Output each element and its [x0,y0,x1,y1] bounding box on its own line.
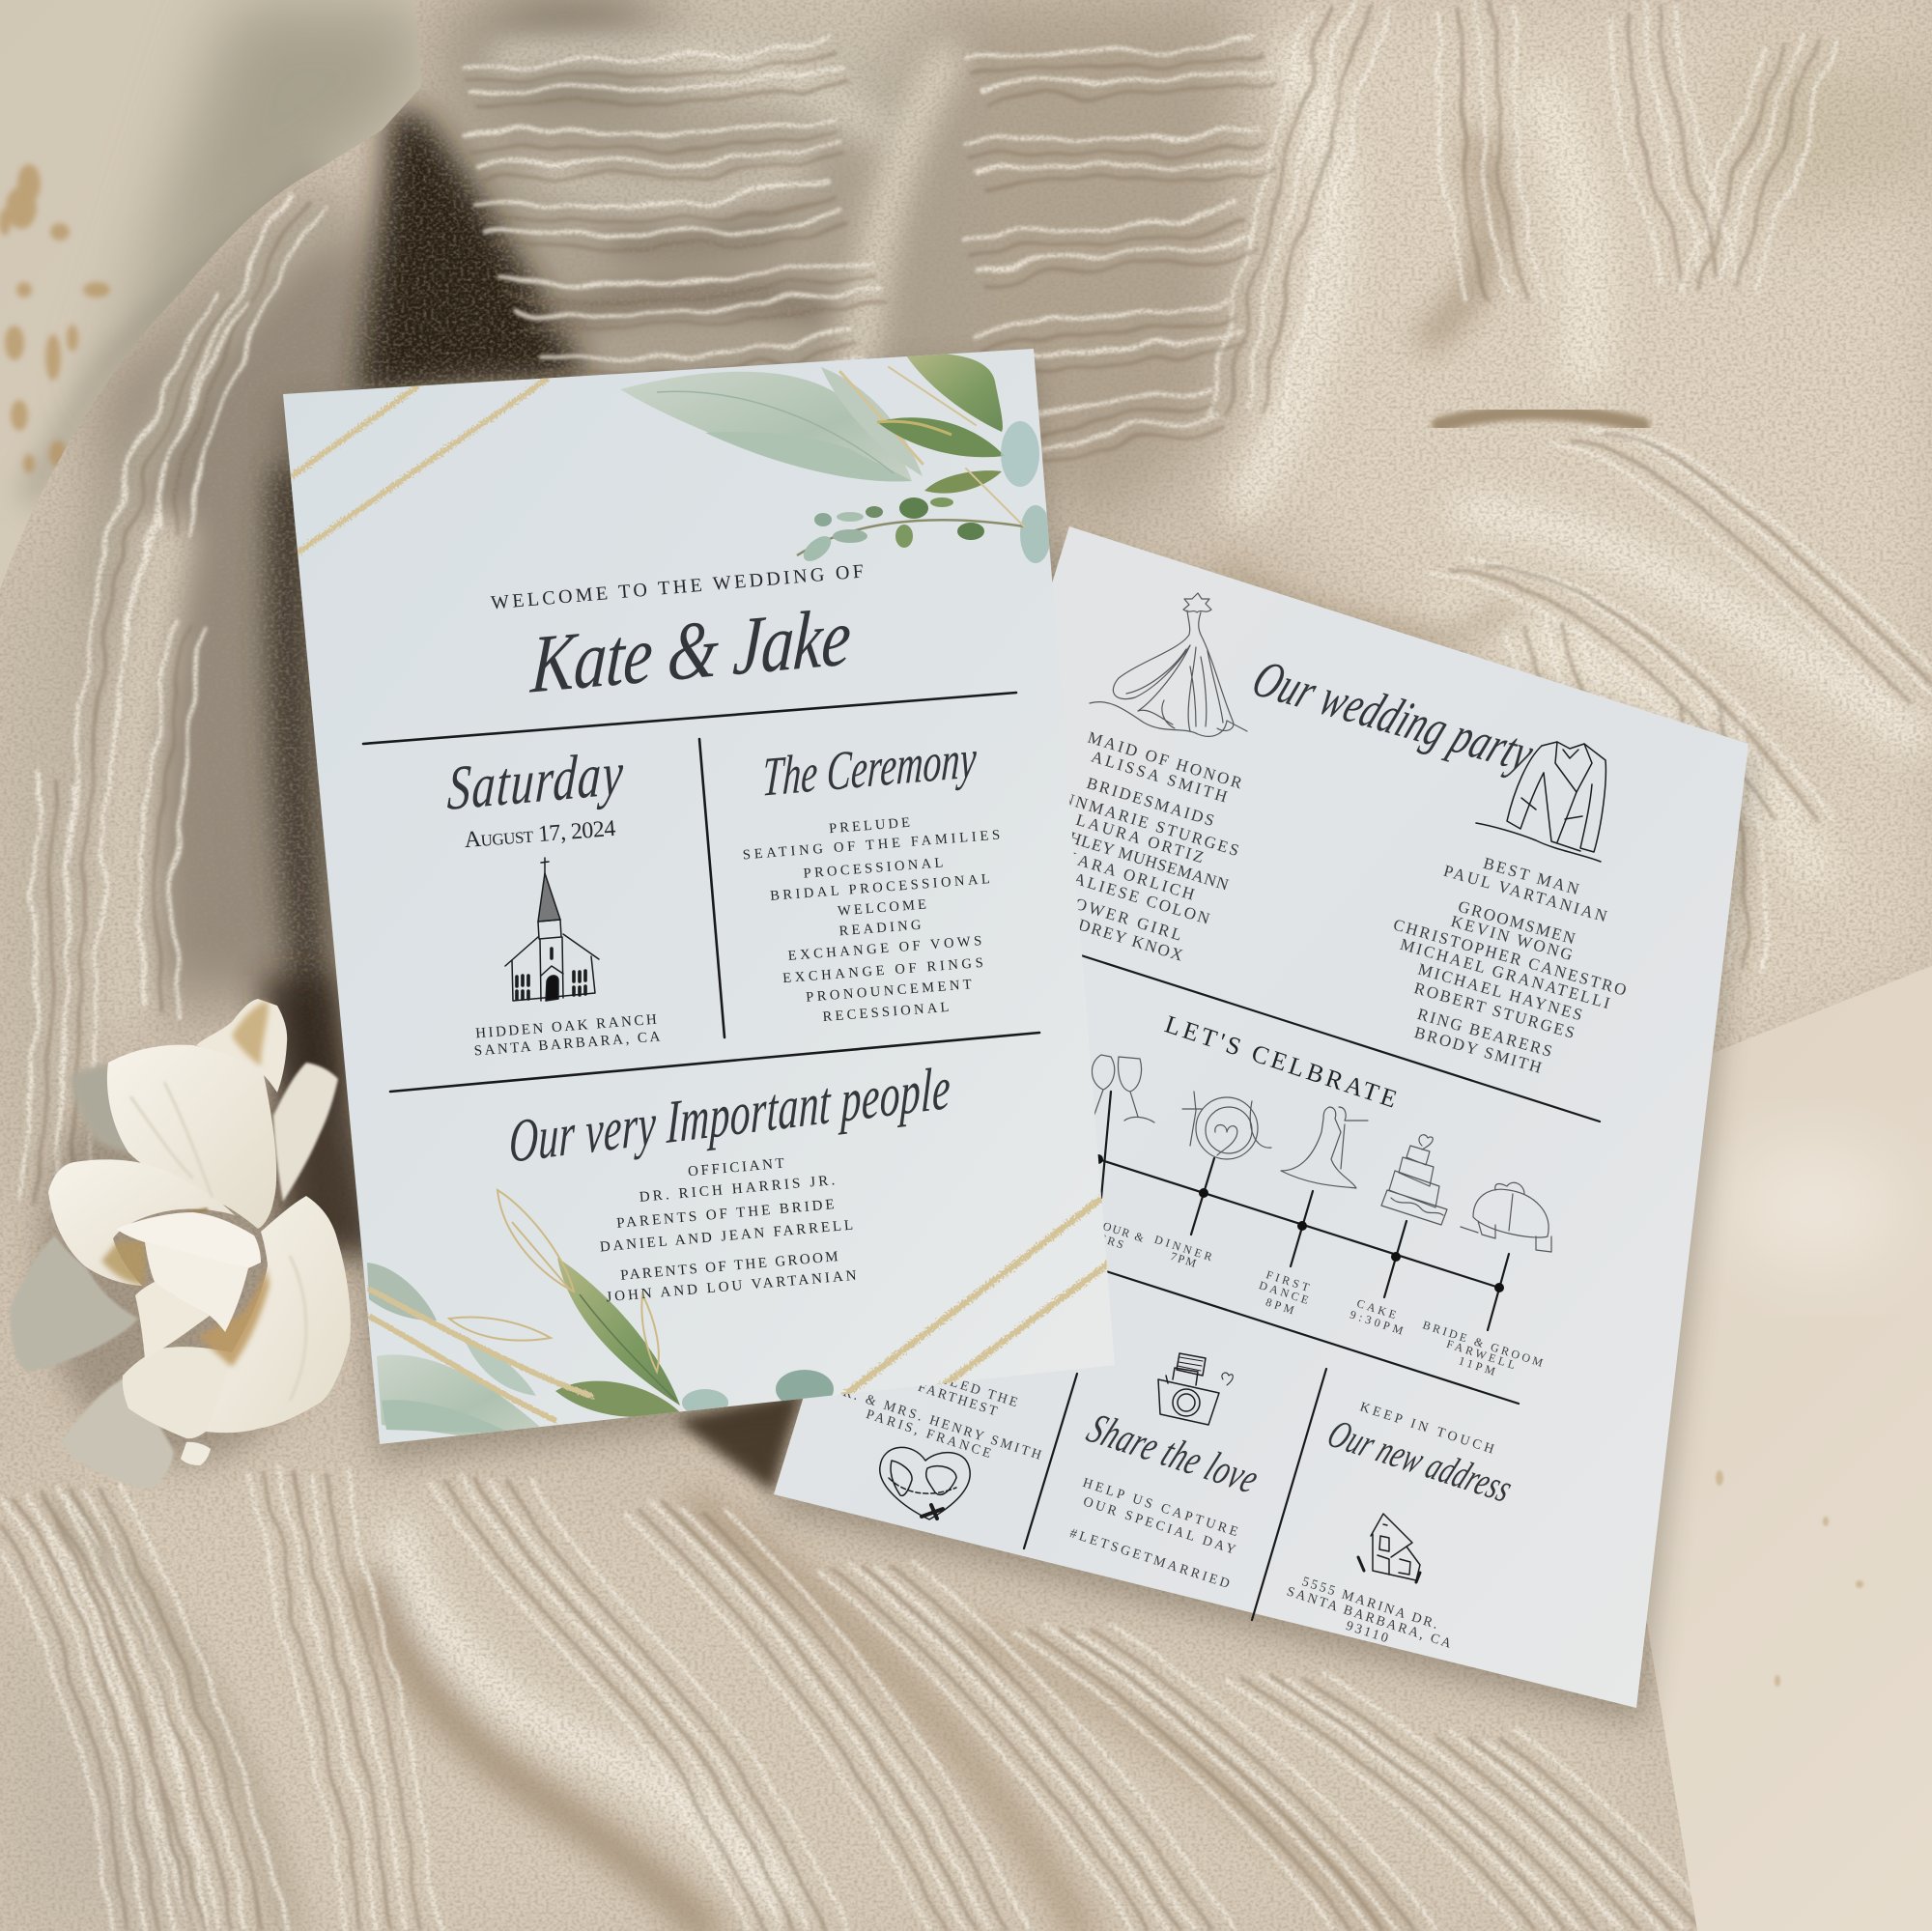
panel: date and venue: HIDDEN OAK RANCH [475,1012,657,1041]
decoration: gold diagonal lines top left [292,380,546,554]
timeline labels: 11PM [1457,1353,1497,1378]
panel: ceremony order: READING [838,918,923,939]
left column: bride party names [1045,728,1245,965]
panel: important people: DANIEL AND JEAN FARRELL [599,1218,854,1255]
panel: important people: PARENTS OF THE GROOM [620,1249,838,1284]
panel: share the love: Share the love [1080,1406,1266,1502]
right column: groom party names: MICHAEL HAYNES [1416,960,1584,1024]
panel: our new address: 93110 [1344,1619,1390,1646]
panel: share the love: OUR SPECIAL DAY [1081,1494,1237,1558]
panel: ceremony order: BRIDAL PROCESSIONAL [770,871,990,904]
timeline labels [1022,1193,1545,1378]
icon: wedding dress [1090,593,1247,736]
shadow: dark gap beside flower [261,976,382,1256]
panel: ceremony order [742,728,1001,1025]
panel: important people: OFFICIANT [687,1156,785,1179]
panel: our new address: KEEP IN TOUCH [1358,1400,1495,1458]
heading: welcome: WELCOME TO THE WEDDING OF [490,561,865,613]
right column: groom party names: GROOMSMEN [1456,897,1577,948]
timeline labels: 8PM [1264,1295,1296,1317]
foliage: bottom left watercolor leaves [367,1190,834,1439]
panel: ceremony order: PRONOUNCEMENT [806,977,973,1006]
heading: let's celebrate: LET'S CELBRATE [1161,1009,1401,1114]
left column: bride party names: ANNMARIE STURGES [1046,784,1241,860]
shadows beneath cards [275,362,1753,1724]
panel: our new address [1285,1400,1520,1652]
panel: ceremony order: PROCESSIONAL [803,855,944,882]
timeline labels: DINNER [1152,1233,1214,1264]
panel: ceremony order: EXCHANGE OF VOWS [787,933,982,964]
panel: traveled the farthest: TRAVELED THE [895,1358,1019,1410]
heading: couple names: Kate & Jake [528,590,853,710]
panel: share the love [1067,1353,1266,1592]
panel: date and venue: Saturday [446,739,625,824]
heading: our wedding party: Our wedding party [1244,650,1543,783]
left column: bride party names: KARA ORLICH [1062,846,1197,904]
panel: important people: DR. RICH HARRIS JR. [639,1173,836,1206]
right column: groom party names: ROBERT STURGES [1412,979,1577,1042]
panel: traveled the farthest: PARIS, FRANCE [864,1407,993,1462]
panel: ceremony order: PRELUDE [829,815,911,837]
timeline labels: FIRST [1264,1267,1312,1294]
icon: getaway car [1461,1182,1551,1252]
foliage: top right watercolor leaves [620,354,1051,566]
right column: groom party names: RING BEARERS [1415,1005,1554,1061]
panel: our new address: Our new address [1321,1411,1520,1511]
left column: bride party names: ANALIESE COLON [1045,861,1211,928]
panel: ceremony order: The Ceremony [761,728,979,809]
icon: church [505,858,599,1001]
right column: groom party names: KEVIN WONG [1449,912,1575,964]
timeline chart [1094,1092,1509,1330]
icon: groom jacket [1476,742,1605,862]
icon: wine glasses [1092,1055,1154,1122]
card: front, wedding programme [283,349,1115,1444]
panel: date and venue: SANTA BARBARA, CA [473,1029,661,1060]
icon: first dance couple [1281,1107,1368,1188]
left column: bride party names: ASHLEY MUHSEMANN [1045,821,1231,895]
icon: house [1358,1514,1420,1582]
timeline labels: FARWELL [1445,1337,1517,1372]
panel: important people [508,1053,951,1305]
panel: important people: Our very Important people [508,1053,951,1176]
panel: share the love: #LETSGETMARRIED [1067,1526,1232,1592]
right column: groom party names: CHRISTOPHER CANESTRO [1391,915,1629,1000]
panel: traveled the farthest: FARTHEST [916,1380,999,1419]
panel: ceremony order: WELCOME [838,896,927,920]
timeline labels: COCKTAIL HOUR & [1022,1193,1147,1245]
icon: heart globe [880,1447,970,1519]
timeline labels: DANCE [1258,1278,1310,1307]
panel: our new address: SANTA BARBARA, CA [1285,1584,1454,1652]
timeline labels: 7PM [1169,1249,1198,1270]
timeline labels: BRIDE & GROOM [1421,1318,1545,1370]
icon: camera [1158,1353,1233,1425]
panel: date and venue [446,739,661,1060]
icon: dinner plate [1182,1092,1271,1159]
panel: our new address: 5555 MARINA DR. [1300,1575,1439,1633]
card: back side, wedding party and timeline [774,526,1748,1708]
right column: groom party names [1391,854,1629,1077]
panel: ceremony order: RECESSIONAL [822,1000,950,1025]
timeline labels: CAKE [1355,1296,1398,1321]
left column: bride party names: LAURA ORTIZ [1074,810,1206,866]
timeline labels: APPETIZERS [1038,1211,1125,1252]
right column: groom party names: PAUL VARTANIAN [1441,862,1609,925]
panel: date and venue: August 17, 2024 [464,816,616,853]
icon: wedding cake [1381,1135,1447,1225]
right column: groom party names: BRODY SMITH [1412,1023,1544,1077]
timeline labels: 9:30PM [1349,1308,1406,1338]
panel: share the love: HELP US CAPTURE [1081,1476,1239,1540]
flower: white gardenia [10,999,351,1489]
left column: bride party names: FLOWER GIRL [1049,887,1184,945]
panel: ceremony order: SEATING OF THE FAMILIES [742,828,1001,863]
left column: bride party names: AUDREY KNOX [1050,907,1185,965]
panel: important people: JOHN AND LOU VARTANIAN [606,1268,857,1305]
panel: traveled the farthest [827,1358,1043,1519]
cloth: dark fold wedge [357,106,589,396]
left column: bride party names: BRIDESMAIDS [1085,774,1216,830]
panel: ceremony order: EXCHANGE OF RINGS [782,955,983,986]
shadow: fold below front card [676,1391,802,1492]
panel: important people: PARENTS OF THE BRIDE [616,1197,835,1232]
panel: traveled the farthest: MR. & MRS. HENRY SMITH [827,1380,1043,1463]
right column: groom party names: BEST MAN [1481,854,1581,898]
right column: groom party names: MICHAEL GRANATELLI [1398,935,1612,1012]
left column: bride party names: MAID OF HONOR [1086,728,1245,793]
left column: bride party names: ALISSA SMITH [1089,748,1230,806]
decoration: gold diagonal lines bottom right [838,1198,1110,1401]
